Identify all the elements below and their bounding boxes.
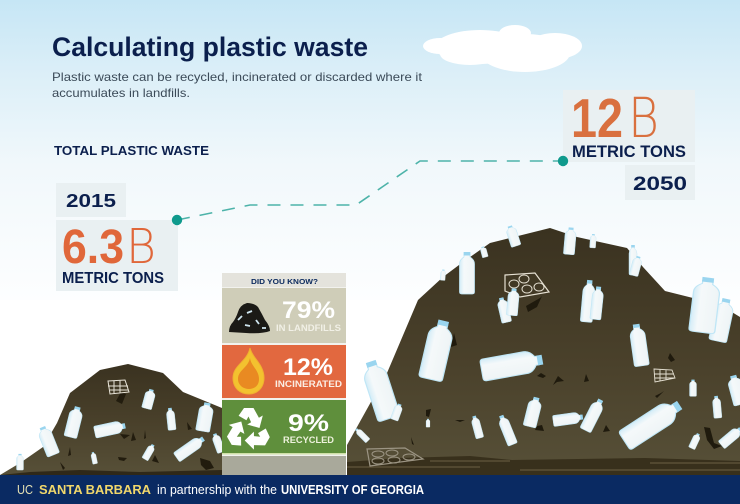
dot: 2015 marker	[172, 215, 182, 225]
callout: 2015	[56, 183, 178, 291]
panel: did you know	[222, 273, 346, 475]
footer band: SANTA BARBARA	[39, 482, 152, 497]
callout: 2015: METRIC TONS	[62, 270, 164, 287]
callout: 2015: B	[126, 219, 156, 275]
callout: 2015: 6.3	[62, 221, 124, 274]
icon: recycle arrows	[222, 408, 273, 453]
panel: incinerated 12%	[222, 345, 346, 398]
cloud	[423, 25, 582, 72]
callout: 2050: B	[628, 86, 659, 150]
panel: landfills 79%: IN LANDFILLS	[276, 323, 341, 334]
dot: 2050 marker	[558, 156, 568, 166]
panel: landfills 79%: 79%	[282, 297, 335, 324]
footer band: in partnership with the	[157, 483, 277, 497]
callout: 2050: METRIC TONS	[572, 143, 686, 161]
footer band	[0, 475, 740, 504]
heading: did you know	[222, 273, 346, 287]
subtitle text: accumulates in landfills.	[52, 86, 190, 100]
sky background	[0, 0, 740, 300]
panel: recycled 9%	[222, 400, 346, 454]
title: Calculating plastic waste	[52, 32, 368, 62]
footer band: UC	[17, 482, 33, 497]
callout: 2050	[563, 86, 695, 200]
subtitle text	[52, 70, 423, 100]
dashed trend line	[177, 161, 563, 220]
panel: landfills 79%	[222, 288, 346, 343]
callout: 2050: 2050	[633, 174, 687, 195]
small landfill hill	[0, 364, 225, 475]
subtitle text: Plastic waste can be recycled, incinerated or discarded where it	[52, 70, 423, 84]
panel: incinerated 12%: INCINERATED	[275, 379, 342, 390]
heading: total plastic waste: TOTAL PLASTIC WASTE	[54, 144, 209, 158]
callout: 2015: 2015	[66, 191, 116, 211]
large landfill hill	[347, 224, 740, 475]
heading: did you know: DID YOU KNOW?	[251, 277, 318, 286]
panel: recycled 9%: RECYCLED	[283, 435, 334, 446]
panel: incinerated 12%: 12%	[283, 354, 333, 381]
footer band: UNIVERSITY OF GEORGIA	[281, 483, 424, 497]
callout: 2050: 12	[571, 87, 623, 149]
panel: recycled 9%: 9%	[288, 410, 329, 437]
